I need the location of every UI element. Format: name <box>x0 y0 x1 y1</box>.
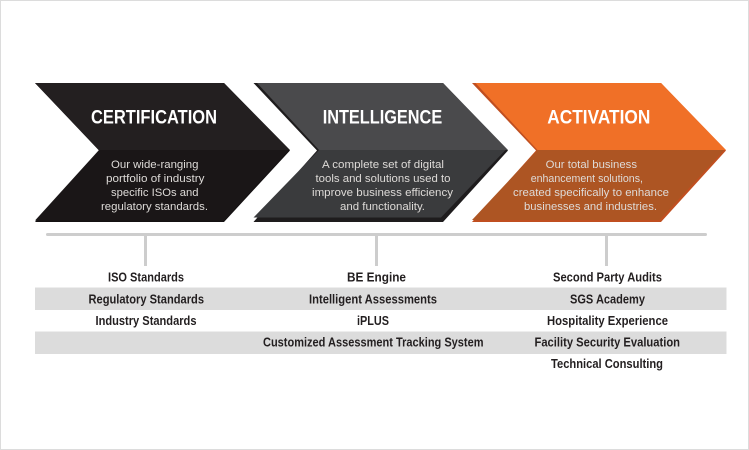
text: intelligence description: improve business efficiency <box>312 187 454 199</box>
text: certification description: portfolio of industry <box>106 173 205 185</box>
list: intelligence items: BE Engine <box>347 270 406 284</box>
text: activation description: enhancement solutions, <box>531 173 643 185</box>
text: certification description: regulatory standards. <box>101 201 208 213</box>
panel: intelligence chevron <box>254 83 508 222</box>
list: activation items: Technical Consulting <box>551 357 663 371</box>
text: certification description: Our wide-ranging <box>111 159 198 171</box>
list: certification items: ISO Standards <box>108 270 184 284</box>
text: activation description: Our total business <box>546 159 638 171</box>
panel: activation chevron <box>472 83 726 222</box>
list: intelligence items: Intelligent Assessments <box>309 292 437 306</box>
connector bracket <box>46 233 707 266</box>
list: certification items: Regulatory Standards <box>88 292 204 306</box>
band: row 2 <box>35 288 726 310</box>
list: activation items: Facility Security Evaluation <box>534 336 680 350</box>
text: intelligence description: and functionality. <box>340 201 425 213</box>
heading: intelligence: INTELLIGENCE <box>323 108 442 128</box>
list: intelligence items: Customized Assessment Tracking System <box>263 336 484 350</box>
list: certification items <box>88 270 204 328</box>
text: intelligence description: tools and solutions used to <box>316 173 450 185</box>
text: certification description <box>101 159 208 213</box>
text: intelligence description: A complete set of digital <box>322 159 444 171</box>
panel: certification chevron <box>35 83 290 222</box>
list: certification items: Industry Standards <box>96 314 197 328</box>
text: activation description <box>513 159 669 213</box>
text: intelligence description <box>312 159 454 213</box>
text: certification description: specific ISOs and <box>111 187 198 199</box>
list: activation items: Second Party Audits <box>553 270 662 284</box>
text: activation description: businesses and industries. <box>524 201 657 213</box>
list: activation items <box>534 270 680 371</box>
list: activation items: Hospitality Experience <box>547 314 668 328</box>
heading: activation: ACTIVATION <box>547 108 650 128</box>
list: intelligence items: iPLUS <box>357 314 389 328</box>
text: activation description: created specifically to enhance <box>513 187 669 199</box>
list: intelligence items <box>263 270 484 350</box>
list: activation items: SGS Academy <box>570 292 645 306</box>
heading: certification: CERTIFICATION <box>91 108 217 128</box>
band: row 4 <box>35 332 726 354</box>
